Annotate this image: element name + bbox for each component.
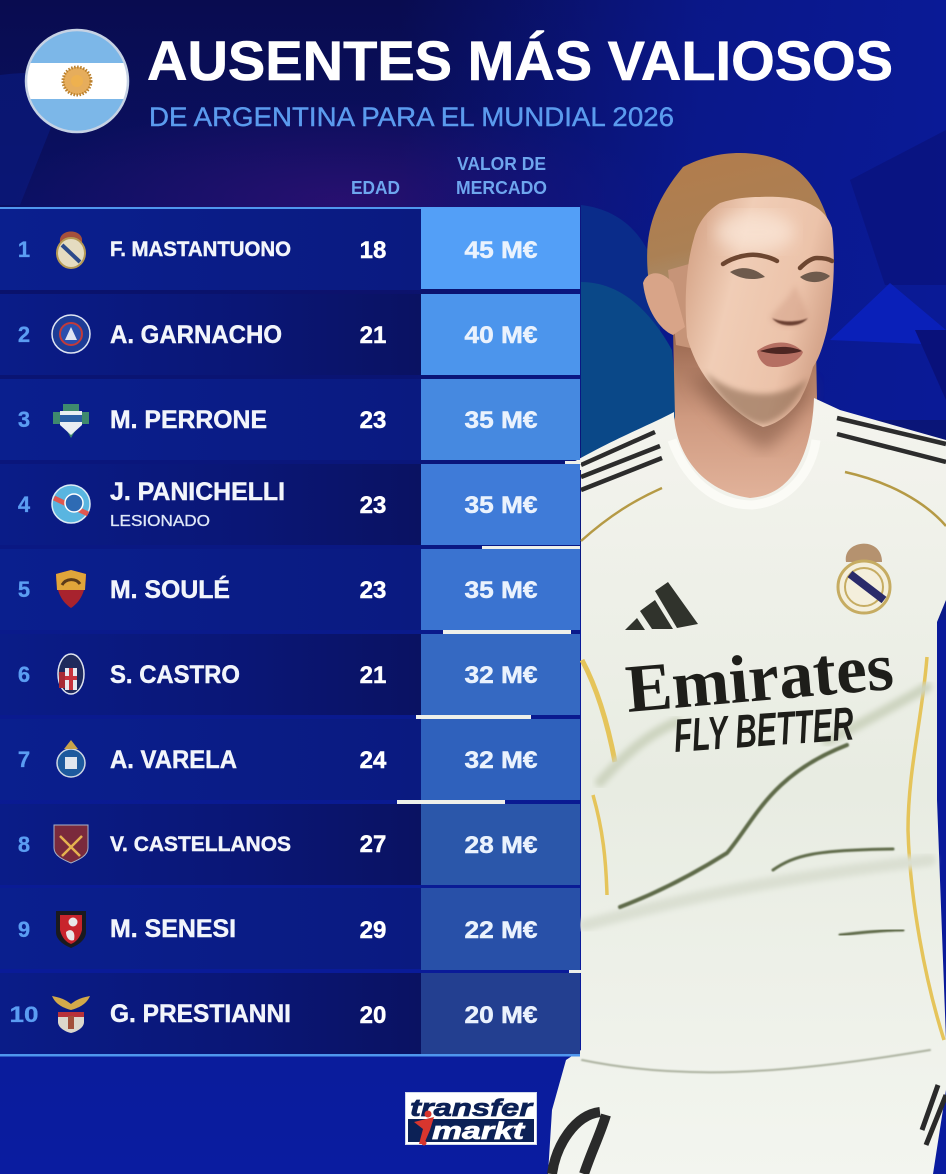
player photo <box>548 153 946 1174</box>
row 1 <box>0 207 580 290</box>
column header: age: EDAD <box>351 178 400 198</box>
logo: transfermarkt <box>406 1092 536 1146</box>
crest: Chelsea <box>52 315 90 353</box>
row 8: 8 <box>18 832 30 857</box>
jaw shadow <box>705 372 808 424</box>
row 3: 23 <box>360 407 386 434</box>
crest: Bologna <box>58 654 84 694</box>
column header: market value: VALOR DE <box>457 154 546 174</box>
row 1: 45 M€ <box>464 237 538 264</box>
row 2: 2 <box>18 322 30 347</box>
table top rule <box>0 207 421 210</box>
row 5: 5 <box>18 577 30 602</box>
row 8: 28 M€ <box>464 832 538 859</box>
crest: Strasbourg <box>52 485 90 523</box>
shoulder stripes right <box>837 418 946 462</box>
column header: market value <box>456 154 547 198</box>
jaw and neck shadow <box>690 375 812 450</box>
row 3: 35 M€ <box>464 407 538 434</box>
row 1: 1 <box>18 237 30 262</box>
row 3 <box>0 379 580 460</box>
player ear <box>643 273 685 335</box>
row 1: 18 <box>360 237 386 264</box>
logo: transfermarkt: markt <box>432 1118 525 1145</box>
row 9: M. SENESI <box>110 915 236 943</box>
adidas logo <box>625 582 698 630</box>
logo: transfermarkt: transfer <box>410 1095 534 1122</box>
crest: Benfica <box>52 996 90 1033</box>
row 4 <box>0 464 580 545</box>
row 5: 35 M€ <box>464 577 538 604</box>
row 2: 40 M€ <box>464 322 538 349</box>
row 7: A. VARELA <box>110 746 237 774</box>
crest: Como <box>53 404 89 438</box>
row 7: 24 <box>360 747 387 774</box>
Real Madrid crest <box>838 544 890 613</box>
shorts number <box>552 1112 606 1174</box>
row 5 <box>0 549 580 630</box>
mouth <box>757 342 803 367</box>
row 6: 21 <box>360 662 386 689</box>
row 4: J. PANICHELLI <box>110 478 285 506</box>
table bottom rule <box>0 1054 580 1056</box>
row 4: 35 M€ <box>464 492 538 519</box>
jersey collar <box>672 440 816 505</box>
row 6: S. CASTRO <box>110 661 240 689</box>
sideburn and cheek join <box>668 262 700 350</box>
gold piping <box>581 472 946 1040</box>
row 5: M. SOULÉ <box>110 575 230 604</box>
row 10: G. PRESTIANNI <box>110 1000 291 1028</box>
row 2: A. GARNACHO <box>110 321 282 349</box>
sponsor Emirates: Emirates <box>623 628 896 727</box>
eyebrows <box>723 255 832 268</box>
jersey folds <box>582 687 930 1072</box>
row 10: 10 <box>10 1002 38 1027</box>
row 9: 22 M€ <box>464 917 538 944</box>
crest: Real Madrid <box>57 232 85 268</box>
row 7: 7 <box>18 747 30 772</box>
row 9 <box>0 888 580 970</box>
crest: West Ham <box>54 825 88 863</box>
row 4: LESIONADO <box>110 513 210 530</box>
logo player icon <box>414 1110 434 1146</box>
row 4: 4 <box>18 492 31 517</box>
player jersey <box>548 398 946 1174</box>
row 7: 32 M€ <box>464 747 538 774</box>
row 2 <box>0 294 580 375</box>
nose <box>770 285 808 327</box>
row 2: 21 <box>360 322 386 349</box>
shorts side stripes <box>922 1085 946 1145</box>
row 10: 20 M€ <box>464 1002 538 1029</box>
icon: Argentina flag <box>26 30 128 132</box>
crest: Roma <box>56 570 86 608</box>
nostrils <box>772 318 808 326</box>
crest: Porto <box>57 740 85 777</box>
column header: market value: MERCADO <box>456 178 547 198</box>
arm slivers behind table gaps <box>397 461 581 973</box>
row 7 <box>0 719 580 800</box>
row 6 <box>0 634 580 715</box>
row 3: 3 <box>18 407 30 432</box>
row 5: 23 <box>360 577 386 604</box>
row 4: 23 <box>360 492 386 519</box>
row 1: F. MASTANTUONO <box>110 238 291 261</box>
crest: Bournemouth <box>56 911 86 948</box>
row 9: 9 <box>18 917 30 942</box>
row 8: 27 <box>360 831 386 858</box>
subtitle: DE ARGENTINA PARA EL MUNDIAL 2026 <box>149 102 674 132</box>
row 6: 6 <box>18 662 30 687</box>
shoulder stripes left <box>581 432 662 490</box>
row 6: 32 M€ <box>464 662 538 689</box>
row 9: 29 <box>360 917 386 944</box>
row 10: 20 <box>360 1002 386 1029</box>
row 3: M. PERRONE <box>110 406 267 434</box>
forehead highlight <box>715 212 795 252</box>
row 10 <box>0 973 580 1054</box>
player hair <box>647 153 833 300</box>
row 8 <box>0 804 580 885</box>
player face <box>686 197 834 427</box>
player neck <box>668 330 820 505</box>
row 8: V. CASTELLANOS <box>110 833 291 856</box>
title: AUSENTES MÁS VALIOSOS <box>147 29 893 92</box>
eyes <box>730 268 830 282</box>
